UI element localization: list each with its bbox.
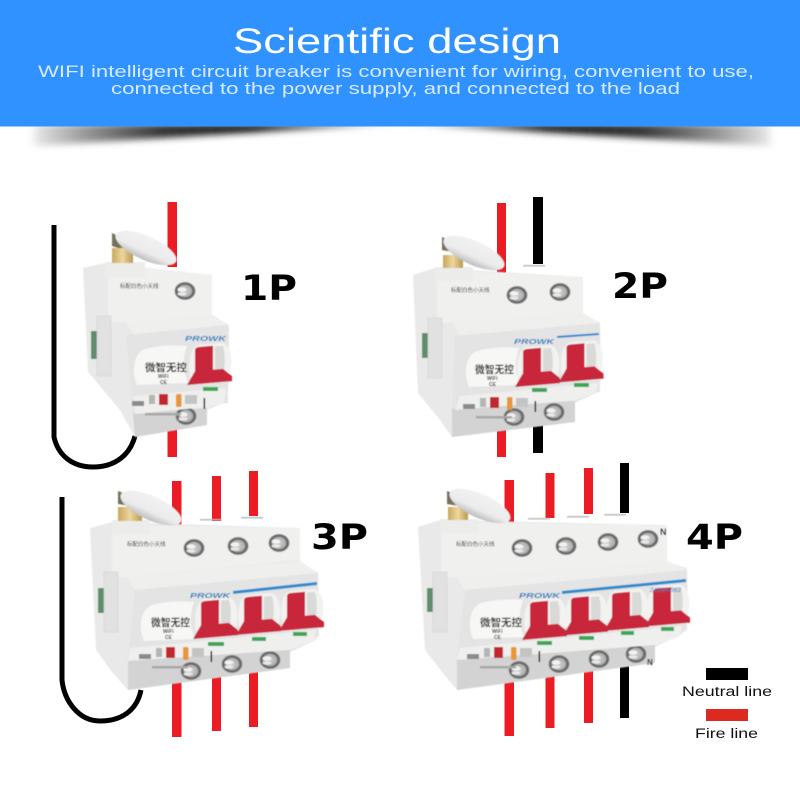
subtitle xyxy=(38,62,754,98)
brand stripe xyxy=(562,579,686,594)
terminal opening xyxy=(523,265,545,266)
fire wires 1P xyxy=(168,202,177,457)
breaker text: 微智无控 xyxy=(151,616,190,629)
fire wires 3P xyxy=(172,471,258,737)
antenna lead 3P xyxy=(62,497,141,721)
breaker text: PROWK xyxy=(519,591,561,600)
terminal openings xyxy=(200,517,263,520)
breaker text xyxy=(127,540,231,641)
breaker text: CE xyxy=(489,382,497,388)
brand stripe xyxy=(557,333,599,338)
antenna xyxy=(105,224,181,277)
breaker text: CE xyxy=(160,380,168,386)
subtitle: connected to the power supply, and connected to the load xyxy=(111,79,680,98)
antenna xyxy=(440,482,515,533)
breaker text: WiFi xyxy=(158,374,169,380)
antenna lead 1P xyxy=(54,225,135,467)
breaker text: 标配白色小天线 xyxy=(451,286,490,294)
legend swatch: neutral xyxy=(706,668,748,680)
2P wiring diagram xyxy=(413,197,668,457)
antenna xyxy=(112,484,186,534)
breaker text: 微智无控 xyxy=(475,363,514,376)
4P wiring diagram xyxy=(418,463,743,736)
label 3P: 3P xyxy=(311,518,368,558)
breaker 4P xyxy=(418,482,690,690)
3P wiring diagram xyxy=(62,471,368,737)
subtitle: WIFI intelligent circuit breaker is convenient for wiring, convenient to use, xyxy=(38,62,754,81)
breaker 1P xyxy=(83,224,232,437)
breaker text: 标配白色小天线 xyxy=(456,540,495,548)
breaker text: WiFi xyxy=(492,629,503,635)
breaker text xyxy=(120,282,227,386)
label 2P: 2P xyxy=(612,267,668,307)
breaker text: PROWK xyxy=(514,337,555,346)
wires 2P xyxy=(497,197,543,457)
breaker text: PROWK xyxy=(185,334,227,343)
header shadow xyxy=(34,124,770,146)
title: Scientific design xyxy=(233,22,561,61)
breaker text: N xyxy=(647,658,653,667)
legend xyxy=(682,668,772,741)
legend label: neutral: Neutral line xyxy=(682,684,772,699)
breaker text: WiFi xyxy=(487,376,498,382)
breaker 3P xyxy=(90,484,324,690)
breaker text: 微智无控 xyxy=(480,616,522,629)
header banner xyxy=(0,0,800,126)
breaker text: CE xyxy=(494,635,502,641)
legend swatch: fire xyxy=(706,709,748,721)
breaker 2P xyxy=(413,229,604,437)
breaker text: 标配白色小天线 xyxy=(120,282,159,290)
wires 4P xyxy=(504,463,629,736)
terminal openings xyxy=(528,514,626,520)
breaker text xyxy=(451,286,555,388)
1P wiring diagram xyxy=(54,202,297,467)
legend label: fire: Fire line xyxy=(695,726,758,741)
antenna xyxy=(435,229,509,281)
brand stripe xyxy=(233,582,317,594)
breaker text: 2JS9H-B63 xyxy=(649,588,681,594)
breaker text: 微智无控 xyxy=(145,361,187,374)
label 4P: 4P xyxy=(686,518,743,558)
breaker text: CE xyxy=(165,635,173,641)
breaker text: N xyxy=(660,527,666,537)
label 1P: 1P xyxy=(241,269,297,309)
breaker text xyxy=(456,527,681,667)
breaker text: PROWK xyxy=(190,591,231,600)
breaker text: 标配白色小天线 xyxy=(127,540,166,548)
breaker text: WiFi xyxy=(163,629,174,635)
